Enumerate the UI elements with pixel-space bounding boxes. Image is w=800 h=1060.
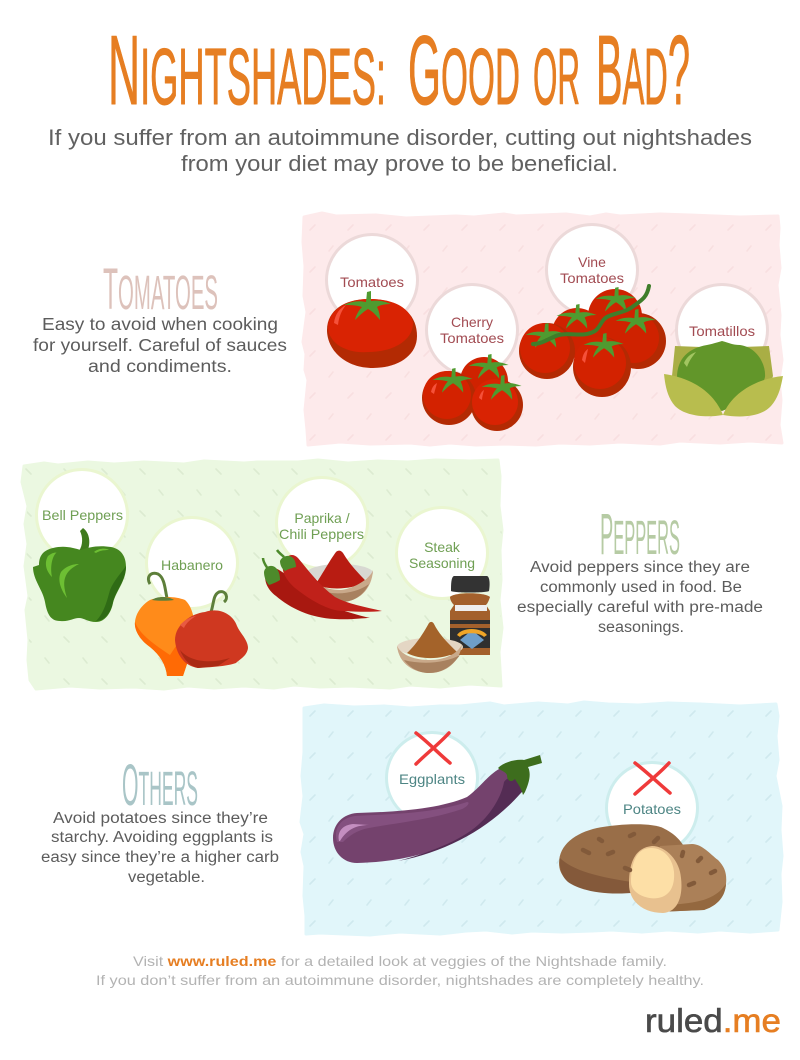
footer note: Visit www.ruled.me for a detailed look at veggies of the Nightshade family.: [133, 953, 667, 969]
item: tomatoes: [326, 234, 418, 368]
text: TOMATOES: [103, 257, 218, 322]
title: NIGHTSHADES:: [108, 15, 386, 125]
item: cherry tomatoes: Tomatoes: [440, 330, 504, 346]
text: tomatoes description: and condiments.: [88, 356, 232, 376]
text: tomatoes description: [33, 314, 287, 376]
text: others description: Avoid potatoes since they’re: [53, 810, 268, 827]
item: tomatoes: Tomatoes: [340, 274, 404, 290]
text: tomatoes description: for yourself. Careful of sauces: [33, 335, 287, 355]
item: tomatillos: [664, 284, 783, 416]
item: paprika / chili peppers: Chili Peppers: [279, 526, 364, 542]
title: BAD?: [596, 15, 690, 125]
item: vine tomatoes: Tomatoes: [560, 270, 624, 286]
text: others description: [41, 810, 279, 886]
item: paprika / chili peppers: Paprika /: [294, 510, 350, 526]
item: cherry tomatoes: [422, 284, 523, 431]
item: bell peppers: Bell Peppers: [42, 507, 123, 523]
item: habanero: Habanero: [161, 557, 223, 573]
subtitle: from your diet may prove to be beneficial.: [181, 151, 618, 176]
text: others description: vegetable.: [128, 869, 205, 886]
text: peppers description: Avoid peppers since they are: [530, 559, 750, 576]
item: habanero: [135, 518, 248, 676]
text: OTHERS: [122, 753, 198, 818]
text: others description: easy since they’re a higher carb: [41, 849, 279, 866]
footer note: If you don’t suffer from an autoimmune disorder, nightshades are completely healthy.: [96, 972, 704, 988]
text: peppers description: commonly used in food. Be: [540, 579, 742, 596]
text: others description: starchy. Avoiding eggplants is: [51, 829, 273, 846]
panel: tomatoes: [303, 213, 783, 445]
subtitle: [48, 125, 752, 176]
item: paprika / chili peppers: [263, 478, 382, 619]
item: potatoes: Potatoes: [623, 801, 681, 817]
item: steak seasoning: Steak: [424, 539, 461, 555]
logo: ruled.me: [645, 1002, 781, 1039]
item: potatoes: [559, 762, 726, 913]
title: GOOD: [408, 15, 520, 125]
panel: others: [301, 702, 782, 935]
text: peppers description: especially careful with pre-made: [517, 599, 763, 616]
item: vine tomatoes: [519, 224, 666, 397]
item: bell peppers: [33, 470, 128, 622]
subtitle: If you suffer from an autoimmune disorder, cutting out nightshades: [48, 125, 752, 150]
item: cherry tomatoes: Cherry: [451, 314, 493, 330]
footer note: [96, 953, 704, 988]
item: eggplants: Eggplants: [399, 771, 465, 787]
panel: peppers: [22, 460, 502, 689]
title: OR: [533, 32, 580, 121]
item: steak seasoning: Seasoning: [409, 555, 475, 571]
text: peppers description: seasonings.: [598, 619, 684, 636]
text: tomatoes description: Easy to avoid when cooking: [42, 314, 278, 334]
item: vine tomatoes: Vine: [578, 254, 606, 270]
item: steak seasoning: [396, 508, 490, 673]
item: eggplants: [333, 732, 542, 863]
text: peppers description: [517, 559, 763, 636]
item: tomatillos: Tomatillos: [689, 323, 755, 339]
